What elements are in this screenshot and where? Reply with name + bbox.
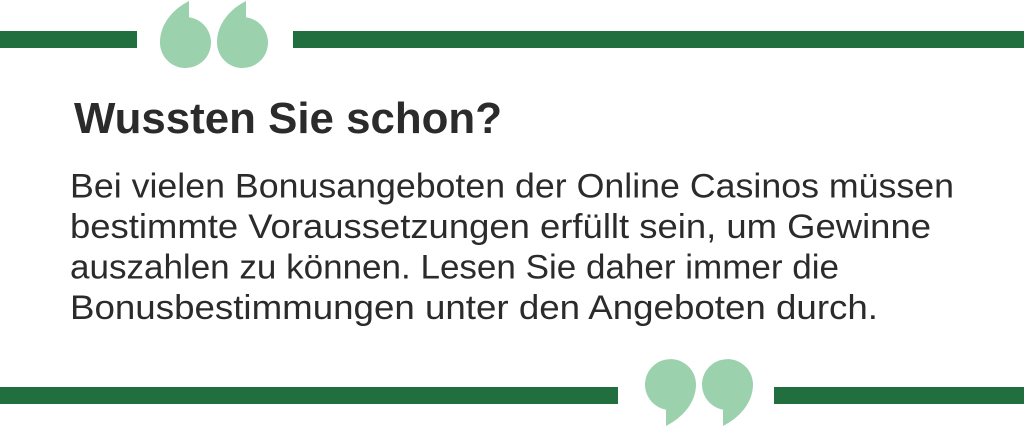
bottom rule <box>0 387 1024 404</box>
body text: bestimmte Voraussetzungen erfüllt sein, um Gewinne <box>70 208 931 246</box>
body text: auszahlen zu können. Lesen Sie daher immer die <box>70 248 839 286</box>
top rule <box>0 31 1024 48</box>
heading: Wussten Sie schon? <box>74 94 502 143</box>
body text <box>70 168 954 327</box>
icon: closing quotation marks <box>645 359 753 426</box>
icon: opening quotation marks <box>160 1 268 68</box>
body text: Bei vielen Bonusangeboten der Online Casinos müssen <box>70 168 954 206</box>
body text: Bonusbestimmungen unter den Angeboten durch. <box>70 289 878 327</box>
